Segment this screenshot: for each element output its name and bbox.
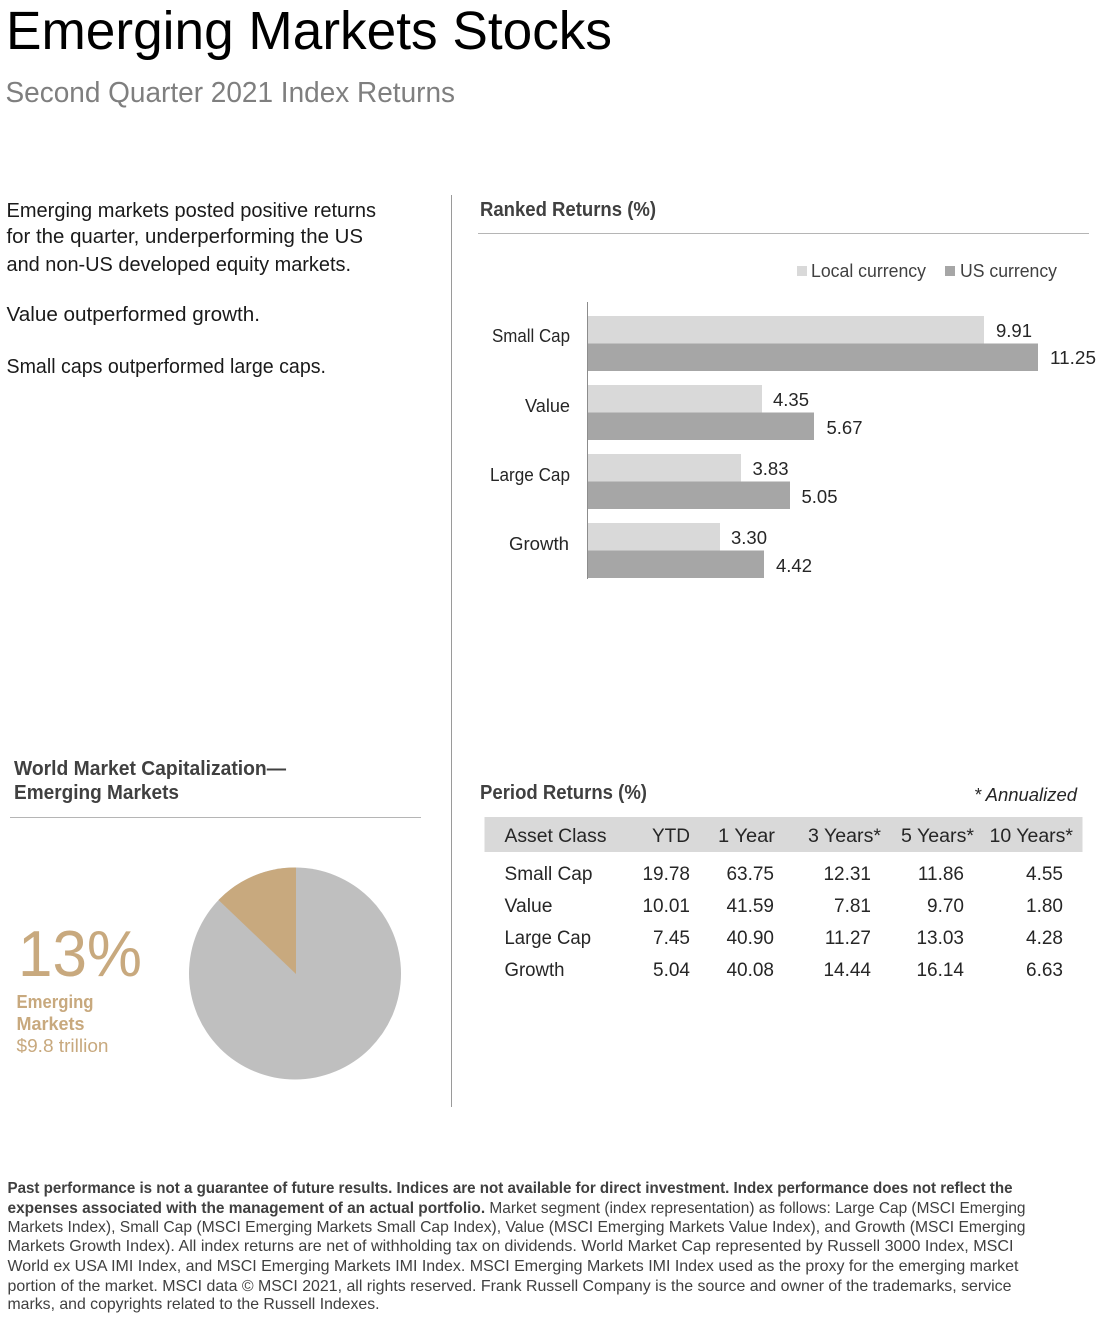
callout: 13% emerging markets: Markets — [16, 1013, 84, 1034]
table: period returns: 12.31 — [823, 864, 871, 885]
table: period returns: 5 Years* — [901, 826, 975, 847]
heading: ranked returns: Ranked Returns (%) — [480, 198, 656, 221]
table: period returns: 11.27 — [825, 928, 871, 949]
note: annualized: * Annualized — [974, 785, 1078, 805]
table: period returns: YTD — [652, 826, 690, 847]
bar chart: ranked returns: Growth — [509, 533, 569, 554]
footnote — [8, 1180, 1026, 1313]
heading: world market capitalization: World Market Capitalization— — [14, 757, 286, 780]
text block: summary: for the quarter, underperforming the US — [6, 225, 363, 248]
footnote: Markets Growth Index). All index returns are net of withholding tax on dividends. World Market Cap represented by Russell 3000 Index, MSCI — [8, 1238, 1013, 1255]
footnote: World ex USA IMI Index, and MSCI Emerging Markets IMI Index. MSCI Emerging Markets IMI Index used as the proxy for the emerging market — [8, 1258, 1019, 1275]
bar chart: ranked returns: 3.30 — [731, 527, 767, 548]
legend: Local currency — [811, 260, 927, 281]
table: period returns: 41.59 — [726, 896, 774, 917]
table: period returns: 14.44 — [823, 960, 871, 981]
footnote: Past performance is not a guarantee of future results. Indices are not available for direct investment. Index performance does not reflect the — [8, 1180, 1013, 1197]
table: period returns: 1.80 — [1026, 896, 1063, 917]
title: Emerging Markets Stocks — [6, 1, 612, 61]
heading: period returns: Period Returns (%) — [480, 781, 647, 804]
table: period returns: Large Cap — [504, 928, 591, 949]
bar chart: ranked returns: Large Cap — [490, 464, 570, 485]
table: period returns: Value — [504, 896, 552, 917]
table: period returns: 13.03 — [916, 928, 964, 949]
footnote: Markets Index), Small Cap (MSCI Emerging Markets Small Cap Index), Value (MSCI Emerging Markets Value Index), and Growth (MSCI Emerging — [8, 1219, 1026, 1236]
subtitle: Second Quarter 2021 Index Returns — [6, 77, 455, 109]
text block: summary: Value outperformed growth. — [6, 303, 260, 326]
table: period returns: 16.14 — [916, 960, 964, 981]
callout: 13% emerging markets — [16, 917, 142, 1056]
bar chart: ranked returns: 4.42 — [776, 555, 812, 576]
table: period returns: 7.45 — [653, 928, 690, 949]
bar chart: ranked returns: 4.35 — [773, 389, 809, 410]
footnote: expenses associated with the management of an actual portfolio. Market segment (index representation) as follows: Large Cap (MSCI Emerging — [8, 1200, 1026, 1217]
table: period returns — [484, 817, 1082, 981]
table: period returns: 6.63 — [1026, 960, 1063, 981]
table: period returns: Asset Class — [504, 826, 606, 847]
text block: summary: and non-US developed equity markets. — [6, 253, 351, 276]
table: period returns: 11.86 — [918, 864, 964, 885]
table: period returns: 19.78 — [642, 864, 690, 885]
table: period returns: 10.01 — [642, 896, 690, 917]
table: period returns: 40.08 — [726, 960, 774, 981]
table: period returns: 40.90 — [726, 928, 774, 949]
text block: summary — [6, 199, 376, 378]
table: period returns: Small Cap — [504, 864, 592, 885]
callout: 13% emerging markets: 13% — [18, 917, 142, 990]
heading: world market capitalization — [14, 757, 286, 804]
bar chart: ranked returns: Small Cap — [492, 325, 570, 346]
heading: world market capitalization: Emerging Markets — [14, 781, 179, 804]
bar chart: ranked returns — [490, 302, 1096, 579]
table: period returns: 5.04 — [653, 960, 690, 981]
text block: summary: Emerging markets posted positive returns — [6, 199, 376, 222]
table: period returns: 3 Years* — [808, 826, 882, 847]
table: period returns: 4.55 — [1026, 864, 1063, 885]
table: period returns: 7.81 — [834, 896, 871, 917]
footnote: portion of the market. MSCI data © MSCI 2021, all rights reserved. Frank Russell Company is the source and owner of the trademarks, service — [8, 1278, 1012, 1295]
table: period returns: 1 Year — [718, 826, 776, 847]
bar chart: ranked returns: 9.91 — [996, 320, 1032, 341]
legend: US currency — [960, 260, 1058, 281]
text block: summary: Small caps outperformed large caps. — [6, 355, 326, 378]
bar chart: ranked returns: 5.67 — [826, 417, 863, 438]
table: period returns: 4.28 — [1026, 928, 1063, 949]
legend — [797, 260, 1058, 281]
callout: 13% emerging markets: Emerging — [16, 991, 94, 1012]
pie chart: world market cap — [189, 867, 401, 1080]
bar chart: ranked returns: 3.83 — [752, 458, 789, 479]
table: period returns: Growth — [504, 960, 564, 981]
callout: 13% emerging markets: $9.8 trillion — [16, 1035, 109, 1056]
footnote: marks, and copyrights related to the Russell Indexes. — [8, 1296, 380, 1313]
bar chart: ranked returns: 5.05 — [802, 486, 838, 507]
table: period returns: 10 Years* — [990, 826, 1074, 847]
bar chart: ranked returns: 11.25 — [1050, 347, 1096, 368]
bar chart: ranked returns: Value — [525, 395, 570, 416]
table: period returns: 63.75 — [726, 864, 774, 885]
table: period returns: 9.70 — [927, 896, 964, 917]
